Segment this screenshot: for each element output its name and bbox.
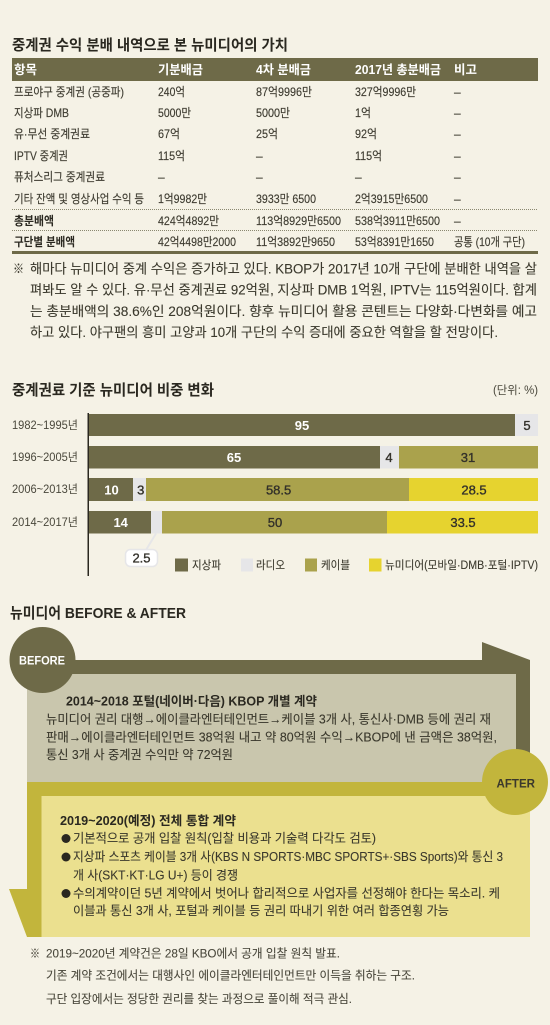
row: IPTV rights: –: [256, 149, 263, 163]
row: futures league rights: –: [256, 170, 263, 184]
before text: 2014~2018 포털(네이버·다음) KBOP 개별 계약: [66, 694, 317, 708]
row: total distribution: [14, 214, 461, 228]
row: pro baseball broadcast rights: 프로야구 중계권 (공중파): [14, 85, 124, 99]
chart axis: [88, 413, 89, 576]
row: futures league rights: [14, 170, 461, 184]
bar: 1996-2005: 4: [385, 450, 393, 465]
row: futures league rights: –: [158, 170, 165, 184]
bar: 1996-2005: 65: [227, 450, 241, 465]
unit label: (단위: %): [493, 384, 538, 397]
bar: 2014-2017: 14: [113, 515, 129, 530]
legend: 뉴미디어(모바일·DMB·포털·IPTV): [385, 558, 538, 572]
row: wired and wireless rights: 25억: [256, 127, 278, 141]
row: terrestrial DMB: 1억: [355, 106, 371, 120]
after text: 지상파 스포츠 케이블 3개 사(KBS N SPORTS·MBC SPORTS+·SBS Sports)와 통신 3: [73, 850, 503, 864]
before text: 판매→에이클라엔터테인먼트 38억원 내고 약 80억원 수익→KBOP에 낸 금액은 38억원,: [46, 730, 497, 744]
after panel background: [42, 796, 530, 937]
text block: footnote: 2019~2020년 계약건은 28일 KBO에서 공개 입찰 원칙 발표.: [46, 946, 340, 960]
after text: 수의계약이던 5년 계약에서 벗어나 합리적으로 사업자를 선정해야 한다는 목소리. 케: [73, 886, 500, 900]
after text: 개 사(SKT·KT·LG U+) 등이 경쟁: [73, 868, 238, 882]
text block: footnote: 구단 입장에서는 정당한 권리를 찾는 과정으로 풀이해 적극 관심.: [46, 992, 352, 1006]
row: total distribution: –: [454, 214, 461, 228]
row: distribution per club: 11억3892만9650: [256, 235, 335, 249]
text block: table note: 해마다 뉴미디어 중계 수익은 증가하고 있다. KBOP가 2017년 10개 구단에 분배한 내역을 살: [30, 262, 537, 276]
row: other balance and video business: 3933만 6500: [256, 192, 316, 206]
table header row: 4차 분배금: [256, 63, 311, 77]
row: terrestrial DMB: –: [454, 106, 461, 120]
row: wired and wireless rights: [14, 127, 461, 141]
text block: table note: 하고 있다. 야구팬의 흥미 고양과 10개 구단의 수익 증대에 중요한 역할을 할 전망이다.: [30, 325, 498, 340]
heading: revenue distribution table: 중계권 수익 분배 내역으로 본 뉴미디어의 가치: [12, 37, 288, 54]
row: other balance and video business: 1억9982만: [158, 192, 207, 206]
row: pro baseball broadcast rights: 87억9996만: [256, 85, 312, 99]
bar: 1996-2005: 1996~2005년: [12, 451, 78, 464]
row: total distribution: 538억3911만6500: [355, 214, 440, 228]
stacked bar chart: [12, 413, 538, 576]
panel: after: [9, 749, 548, 937]
text block: footnote: [30, 946, 415, 1006]
bar: 2014-2017: 50: [268, 515, 282, 530]
text block: footnote: ※: [30, 946, 40, 960]
row: IPTV rights: 115억: [355, 149, 382, 163]
row: distribution per club: 53억8391만1650: [355, 235, 434, 249]
bar: 1996-2005: [12, 446, 538, 468]
legend: [175, 558, 538, 572]
bar: 2014-2017: 33.5: [450, 515, 476, 530]
heading: new media share chart: 중계권료 기준 뉴미디어 비중 변화: [12, 382, 214, 399]
text block: table note: [13, 262, 537, 340]
row: wired and wireless rights: 92억: [355, 127, 377, 141]
ribbon band: [42, 642, 530, 790]
badge: before: BEFORE: [19, 654, 65, 668]
bar: 1996-2005: 31: [461, 450, 475, 465]
bar: 2006-2013: 58.5: [266, 482, 291, 498]
row: IPTV rights: 115억: [158, 149, 185, 163]
row: futures league rights: –: [454, 170, 461, 184]
legend: 지상파: [192, 559, 221, 572]
table header row: [12, 58, 538, 81]
callout: radio 2.5: 2.5: [132, 550, 151, 566]
row: terrestrial DMB: 5000만: [256, 106, 290, 120]
bar: 2014-2017: 2014~2017년: [12, 516, 78, 529]
before text: 뉴미디어 권리 대행→에이클라엔터테인먼트→케이블 3개 사, 통신사·DMB 등에 권리 재: [46, 712, 491, 726]
callout: radio 2.5: [126, 534, 158, 566]
after text: 기본적으로 공개 입찰 원칙(입찰 비용과 기술력 다각도 검토): [73, 832, 376, 846]
bar: 2006-2013: 2006~2013년: [12, 483, 78, 496]
table header row: 비고: [454, 63, 477, 77]
row: wired and wireless rights: 67억: [158, 127, 180, 141]
row: wired and wireless rights: –: [454, 127, 461, 141]
row: wired and wireless rights: 유·무선 중계권료: [14, 127, 90, 141]
bar: 2006-2013: 3: [137, 482, 144, 498]
row: distribution per club: 구단별 분배액: [14, 235, 75, 249]
row: other balance and video business: –: [454, 192, 461, 206]
row: terrestrial DMB: [14, 106, 461, 120]
before text: [46, 694, 497, 762]
row: terrestrial DMB: 5000만: [158, 106, 191, 120]
row: pro baseball broadcast rights: –: [454, 85, 461, 99]
before panel background: [27, 674, 516, 782]
row: distribution per club: 공통 (10개 구단): [454, 235, 525, 249]
row: pro baseball broadcast rights: 327억9996만: [355, 85, 416, 99]
badge: after: AFTER: [496, 776, 535, 790]
heading: before and after: 뉴미디어 BEFORE & AFTER: [10, 605, 186, 622]
row: IPTV rights: [14, 149, 461, 163]
row: other balance and video business: 기타 잔액 및 영상사업 수익 등: [14, 192, 144, 206]
panel: before: [10, 627, 530, 790]
row: IPTV rights: –: [454, 149, 461, 163]
row: distribution per club: 42억4498만2000: [158, 235, 236, 249]
badge: after: [482, 749, 548, 815]
table header row: 항목: [14, 62, 37, 77]
badge: before: [10, 627, 76, 693]
bar: 1982-1995: [12, 414, 538, 436]
panel: revenue distribution table: [12, 58, 538, 254]
row: IPTV rights: IPTV 중계권: [14, 149, 68, 163]
row: futures league rights: –: [355, 170, 362, 184]
legend: 라디오: [256, 559, 285, 572]
row: total distribution: 113억8929만6500: [256, 214, 341, 228]
bar: 1982-1995: 95: [295, 418, 309, 433]
bar: 2006-2013: 28.5: [461, 482, 487, 498]
legend: 케이블: [321, 559, 350, 572]
row: other balance and video business: 2억3915만6500: [355, 192, 428, 206]
ribbon band: [9, 782, 530, 937]
bar: 1982-1995: 5: [523, 418, 531, 433]
text block: table note: ※: [13, 262, 24, 276]
bar: 1982-1995: 1982~1995년: [12, 419, 78, 432]
row: pro baseball broadcast rights: [14, 85, 461, 99]
row: pro baseball broadcast rights: 240억: [158, 85, 185, 99]
row: other balance and video business: [14, 192, 461, 206]
row: total distribution: 424억4892만: [158, 214, 219, 228]
text block: table note: 는 총분배액의 38.6%인 208억원이다. 향후 뉴미디어 활용 콘텐트는 다양화·다변화를 예고: [30, 304, 537, 319]
row: total distribution: 총분배액: [14, 214, 54, 228]
before text: 통신 3개 사 중계권 수익만 약 72억원: [46, 747, 233, 762]
row: distribution per club: [14, 235, 525, 249]
after text: [60, 813, 503, 918]
after text: 2019~2020(예정) 전체 통합 계약: [60, 813, 236, 828]
text block: table note: 펴봐도 알 수 있다. 유·무선 중계권료 92억원, 지상파 DMB 1억원, IPTV는 115억원이다. 합계: [30, 282, 537, 298]
after text: 이블과 통신 3개 사, 포털과 케이블 등 권리 따내기 위한 여러 합종연횡 가능: [73, 904, 449, 918]
row: terrestrial DMB: 지상파 DMB: [14, 106, 69, 120]
text block: footnote: 기존 계약 조건에서는 대행사인 에이클라엔터테인먼트만 이득을 취하는 구조.: [46, 968, 415, 982]
bar: 2014-2017: [12, 511, 538, 534]
bar: 2006-2013: 10: [104, 482, 119, 498]
bar: 2006-2013: [12, 478, 538, 501]
table header row: 기분배금: [158, 62, 203, 77]
table header row: 2017년 총분배금: [355, 63, 441, 77]
row: futures league rights: 퓨처스리그 중계권료: [14, 170, 105, 184]
